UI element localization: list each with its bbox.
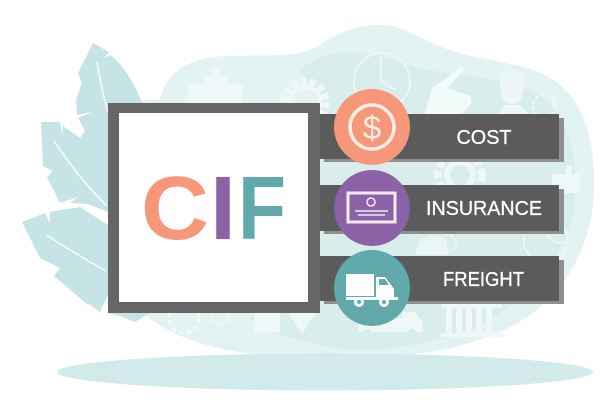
icon: thumbs up (552, 166, 580, 193)
icon: phone call (524, 219, 568, 263)
label: INSURANCE: INSURANCE (426, 198, 542, 220)
background blob (130, 25, 594, 359)
panel: COST bar (320, 114, 564, 162)
title: CIF (141, 159, 286, 259)
icon: bottom gears (169, 303, 229, 333)
icon: clock (354, 53, 410, 109)
icon: bank building (440, 304, 504, 337)
icon: pointing hand (425, 67, 472, 114)
panel: FREIGHT bar (320, 256, 564, 304)
title: CIF: I (210, 159, 236, 259)
ground shadow ellipse (57, 354, 593, 390)
panel: INSURANCE bar (320, 185, 564, 234)
icon: dollar coin circle (334, 89, 410, 165)
icon: businessman (415, 217, 456, 255)
icon: gear middle (438, 153, 482, 197)
leaves (22, 43, 150, 322)
icon: small delivery truck (358, 312, 423, 337)
title: CIF: C (141, 159, 209, 259)
panel: CIF frame (108, 103, 320, 313)
icon: delivery truck circle (334, 250, 410, 326)
title: CIF: F (238, 159, 286, 259)
leaf veins (46, 62, 108, 271)
label: COST: COST (456, 127, 512, 149)
icon: people group (188, 66, 243, 104)
icon: banknote circle (334, 170, 410, 246)
label: FREIGHT: FREIGHT (443, 269, 524, 291)
icon: gear top (285, 82, 325, 122)
icon: bottom document and check (254, 313, 316, 334)
icon: dollar coin circle: $ (363, 109, 381, 146)
icon: person with gear (497, 70, 555, 117)
